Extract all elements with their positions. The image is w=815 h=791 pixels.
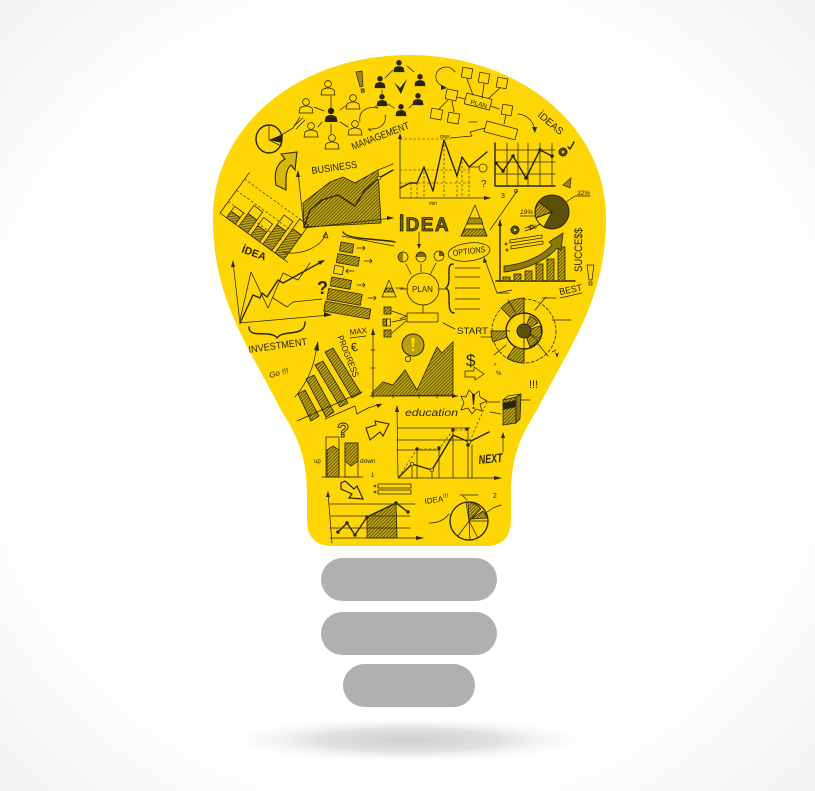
label: start bbox=[443, 323, 489, 336]
icon: euro: € bbox=[349, 340, 360, 355]
tilted bar chart bbox=[220, 173, 317, 262]
brace bbox=[249, 322, 305, 338]
icon: 3D box bbox=[503, 394, 530, 425]
center area chart bbox=[370, 328, 458, 398]
business area chart bbox=[296, 164, 394, 228]
progress bar chart bbox=[295, 341, 362, 421]
diagonal pointer: 3 bbox=[501, 193, 505, 200]
people network: left bbox=[299, 81, 362, 149]
label: success: SUCCE$$ bbox=[573, 228, 585, 272]
label: plan circle: PLAN bbox=[412, 285, 433, 294]
label: investment: INVESTMENT bbox=[248, 337, 308, 356]
ground shadow bbox=[223, 717, 595, 763]
horizontal hatched bars bbox=[324, 232, 395, 319]
label: business: BUSINESS bbox=[311, 160, 358, 177]
label: plan: PLAN bbox=[470, 99, 488, 110]
question mark: ? bbox=[481, 179, 487, 190]
label: management: MANAGEMENT bbox=[350, 121, 411, 153]
wheel chart bbox=[481, 290, 571, 365]
curved arrow bbox=[282, 232, 328, 253]
label: min small: min bbox=[429, 201, 437, 207]
plan diagram bbox=[398, 232, 447, 322]
up and down bars: down bbox=[360, 458, 376, 465]
icon: burst with exclamation bbox=[461, 390, 501, 414]
label: big idea: İDEA bbox=[399, 215, 450, 236]
label: max: MAX bbox=[349, 326, 368, 337]
small rectangles bbox=[374, 484, 411, 494]
peak line chart bbox=[398, 133, 491, 207]
icon: exclamation outline bbox=[587, 265, 594, 285]
label: idea small bbox=[424, 494, 449, 523]
bulb screw base bbox=[321, 558, 497, 707]
up and down bars: up bbox=[314, 459, 321, 465]
pie chart with labels bbox=[520, 190, 590, 231]
label: start: START bbox=[457, 326, 489, 336]
small option squares bbox=[383, 288, 406, 337]
label: ideas: İDEAS bbox=[535, 108, 567, 138]
small pyramid bbox=[382, 280, 396, 297]
label: idea small: !!! bbox=[443, 494, 448, 500]
icon: question mark: ? bbox=[317, 278, 328, 298]
label: education: education bbox=[405, 407, 458, 419]
label: best: BEST bbox=[558, 283, 583, 298]
label: max small: max bbox=[440, 134, 450, 140]
pyramid bbox=[461, 205, 487, 236]
label: progress: PROGRESS bbox=[335, 334, 361, 379]
icon: outline arrow up bbox=[366, 421, 389, 440]
success bar chart bbox=[496, 219, 575, 281]
icon: exclamation bbox=[356, 71, 364, 92]
small note mark: % bbox=[496, 371, 502, 377]
flow chart bbox=[430, 67, 537, 140]
grid line chart bbox=[494, 143, 555, 186]
bottom line chart bbox=[326, 491, 424, 543]
icon: circular arrows bbox=[360, 106, 385, 131]
icon: dollar sign: $ bbox=[466, 351, 476, 370]
icon: target small bbox=[511, 225, 535, 234]
icon: exclamation in circle bbox=[402, 334, 424, 362]
small pie chart bbox=[256, 117, 305, 153]
label: go: Go !!! bbox=[268, 366, 290, 380]
icon: target and check bbox=[559, 142, 574, 156]
bottom pie chart: 2 bbox=[493, 493, 497, 500]
icon: small pen bbox=[563, 178, 571, 188]
diagonal pointer bbox=[490, 190, 518, 230]
up and down bars bbox=[314, 437, 376, 477]
pie chart with labels: 4% bbox=[528, 225, 537, 231]
icon: question mark lower: ? bbox=[337, 420, 349, 442]
label: next with arrow: NEXT bbox=[478, 451, 504, 467]
icon: curved arrow bbox=[275, 152, 297, 190]
education line chart bbox=[395, 400, 502, 480]
investment line chart bbox=[231, 260, 332, 323]
yellow bulb glass bbox=[213, 55, 606, 546]
label: idea: İDEA bbox=[240, 243, 268, 264]
pie chart with labels: 32% bbox=[577, 190, 590, 197]
options list: OPTIONS bbox=[452, 244, 486, 258]
small number one: 1 bbox=[371, 473, 375, 479]
options list bbox=[446, 241, 509, 313]
icon: outline arrow bbox=[465, 367, 484, 380]
people network: right bbox=[374, 60, 426, 116]
pie chart with labels: 19% bbox=[520, 209, 533, 216]
label: idea small: IDEA bbox=[424, 494, 444, 506]
bottom pie chart bbox=[450, 493, 501, 540]
zigzag arrow bbox=[325, 404, 382, 419]
label: exclamation marks: !!! bbox=[529, 379, 538, 391]
icon: outline arrow down bbox=[341, 481, 363, 499]
label: next with arrow bbox=[478, 432, 505, 467]
